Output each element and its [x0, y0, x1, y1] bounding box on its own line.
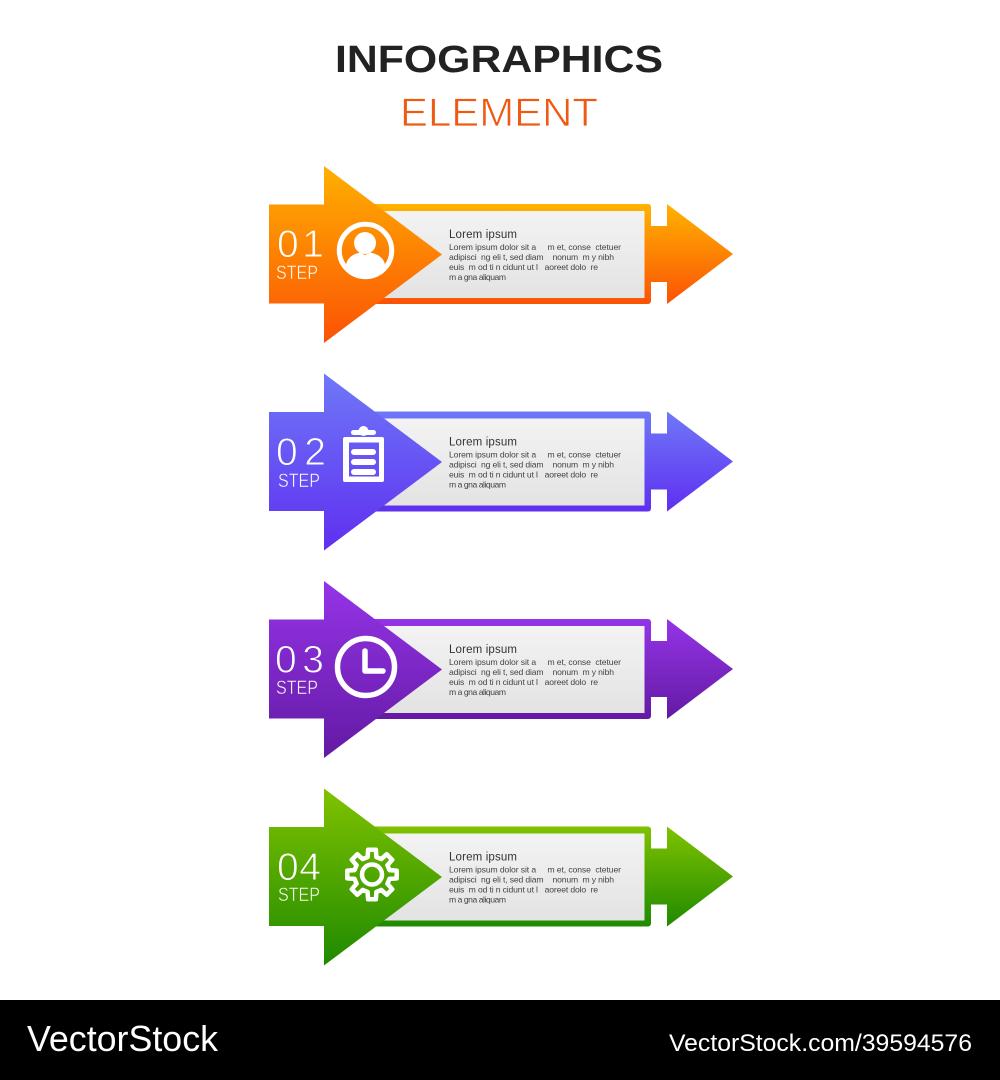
text block: Lorem ipsum	[449, 436, 517, 448]
step label: STEP	[278, 885, 320, 906]
step label: STEP	[278, 471, 320, 492]
icon: gear	[347, 850, 397, 899]
text block: m a gna aliquam	[449, 272, 506, 282]
text block: euis m od ti n cidunt ut l aoreet dolo re	[449, 262, 598, 272]
left arrow	[269, 788, 442, 966]
text block: euis m od ti n cidunt ut l aoreet dolo re	[449, 470, 598, 480]
subtitle: ELEMENT	[400, 91, 598, 135]
text block: Lorem ipsum	[449, 852, 517, 864]
step number: 03	[275, 638, 324, 682]
text block: euis m od ti n cidunt ut l aoreet dolo re	[449, 677, 598, 687]
text block: m a gna aliquam	[449, 480, 506, 490]
step number: 02	[276, 431, 326, 474]
text block: adipisci ng eli t, sed diam nonum m y nibh	[449, 667, 614, 677]
text panel	[370, 211, 644, 298]
step label: STEP	[276, 263, 318, 284]
step 2 arrow row	[269, 374, 733, 550]
frame	[370, 619, 651, 719]
text block	[449, 852, 621, 904]
text block: Lorem ipsum dolor sit a m et, conse ctetuer	[449, 657, 621, 667]
text block: adipisci ng eli t, sed diam nonum m y nibh	[449, 874, 614, 884]
text block: Lorem ipsum	[449, 229, 517, 241]
right arrow	[650, 412, 733, 512]
text block: Lorem ipsum	[449, 644, 517, 656]
step 4 arrow row	[269, 788, 733, 966]
text block: Lorem ipsum dolor sit a m et, conse ctetuer	[449, 450, 621, 460]
step 3 arrow row	[269, 581, 733, 758]
text block: Lorem ipsum dolor sit a m et, conse ctetuer	[449, 242, 621, 252]
icon: clock	[338, 638, 394, 696]
step number: 04	[277, 846, 321, 889]
text block	[449, 229, 621, 282]
frame	[370, 412, 651, 512]
footer image id: VectorStock.com/39594576	[669, 1030, 972, 1057]
text block: euis m od ti n cidunt ut l aoreet dolo re	[449, 884, 598, 894]
text block: adipisci ng eli t, sed diam nonum m y nibh	[449, 252, 614, 262]
title: INFOGRAPHICS	[335, 39, 663, 81]
icon: clipboard	[343, 426, 384, 482]
footer bar	[0, 1000, 1000, 1080]
text block	[449, 436, 621, 490]
step label: STEP	[276, 678, 318, 699]
text panel	[370, 418, 644, 506]
right arrow	[650, 619, 733, 719]
icon: user	[339, 224, 392, 277]
text panel	[370, 626, 644, 713]
text block: m a gna aliquam	[449, 687, 506, 697]
left arrow	[269, 581, 442, 758]
left arrow	[269, 374, 442, 550]
right arrow	[650, 826, 733, 926]
text block: adipisci ng eli t, sed diam nonum m y nibh	[449, 460, 614, 470]
left arrow	[269, 166, 442, 343]
step 1 arrow row	[269, 166, 733, 343]
text block: m a gna aliquam	[449, 894, 506, 904]
text block	[449, 644, 621, 697]
text block: Lorem ipsum dolor sit a m et, conse ctetuer	[449, 864, 621, 874]
text panel	[370, 834, 644, 920]
step number: 01	[277, 223, 324, 266]
frame	[370, 204, 651, 304]
right arrow	[650, 204, 733, 304]
footer brand: VectorStock	[27, 1018, 219, 1059]
frame	[370, 826, 651, 926]
